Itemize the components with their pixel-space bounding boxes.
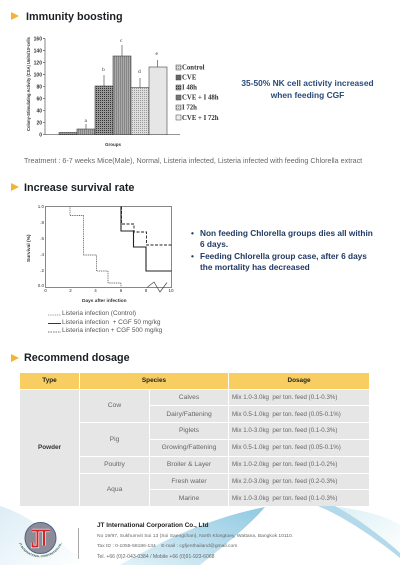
legend: I 48h: [182, 84, 197, 92]
survival legend: [48, 310, 162, 334]
axis labels: .2: [40, 268, 44, 273]
survival line chart: 4: [94, 288, 97, 293]
axis break: [147, 282, 167, 292]
callout: NK cell activity: [241, 78, 374, 100]
bar letters: d: [138, 69, 141, 75]
treatment note: Treatment : 6-7 weeks Mice(Male), Normal, Listeria infected, Listeria infected with feeding Chlorella extract: [24, 156, 362, 164]
y axis labels: 80: [36, 84, 42, 90]
survival line chart: 2: [69, 288, 72, 293]
dosage table: Fresh water: [171, 478, 207, 485]
y axis labels: 160: [34, 36, 42, 42]
dosage table: Powder: [38, 444, 61, 451]
y axis labels: 60: [36, 96, 42, 102]
legend: CVE + I 72h: [182, 115, 219, 122]
survival line chart: 8: [145, 288, 148, 293]
icon: section marker dosage: [11, 354, 19, 362]
dosage table: Species: [142, 377, 166, 384]
company logo: [19, 522, 62, 558]
survival legend: Listeria infection + CGF 500 mg/kg: [62, 327, 162, 334]
axis labels: .8: [40, 220, 44, 225]
dosage table: Pig: [110, 436, 119, 443]
survival line chart: 6: [120, 288, 123, 293]
company info: Tel. +66 (0)2-043-0384 / Mobile +66 (0)91-923-6068: [97, 554, 215, 560]
company info: JT International Corporation Co., Ltd: [97, 522, 208, 529]
y axis labels: 120: [34, 60, 42, 66]
control curve: [70, 206, 121, 287]
y axis labels: 140: [34, 48, 42, 54]
text: Feeding Chlorella group case, after 6 days: [200, 251, 367, 261]
dosage table: [20, 373, 369, 506]
text: •: [191, 251, 194, 261]
legend: [176, 64, 219, 122]
heading: Immunity boosting: Immunity boosting: [26, 11, 123, 23]
legend: Control: [182, 64, 205, 72]
axis labels: .4: [40, 252, 44, 257]
footer divider: [78, 528, 79, 559]
axis labels: 0.0: [38, 283, 44, 288]
dosage table: Broiler & Layer: [167, 461, 211, 468]
heading: Increase survival rate: Increase survival rate: [24, 182, 134, 194]
dosage table: Mix 0.5-1.0kg per ton. feed (0.05-0.1%): [232, 410, 341, 418]
dosage table: Aqua: [107, 486, 122, 493]
y axis labels: 0: [39, 132, 42, 138]
dosage table: Mix 1.0-3.0kg per ton. feed (0.1-0.3%): [232, 394, 337, 401]
dosage table: Mix 0.5-1.0kg per ton. feed (0.05-0.1%): [232, 444, 341, 451]
bullet text: [191, 228, 373, 272]
dosage table: Mix 1.0-3.0kg per ton. feed (0.1-0.3%): [232, 494, 337, 502]
bars: [59, 56, 167, 135]
y axis labels: 40: [36, 108, 42, 114]
y axis labels: [34, 36, 42, 138]
axis labels: 1.0: [38, 204, 44, 209]
dosage table: Cow: [108, 402, 121, 409]
footer wave background: [0, 506, 400, 565]
y axis title: Colony-Stimulating Activity (CSA) Units/10⁵cells: [26, 36, 31, 131]
axis labels: [38, 204, 44, 288]
legend: CVE + I 48h: [182, 94, 219, 102]
dosage table: Growing/Fattening: [162, 444, 216, 451]
axis labels: .6: [40, 236, 44, 241]
survival line chart: [26, 204, 174, 304]
CGF 50 curve: [121, 206, 172, 271]
dosage table: Mix 2.0-3.0kg per ton. feed (0.2-0.3%): [232, 478, 337, 485]
bar letters: c: [120, 38, 123, 44]
y axis labels: 20: [36, 120, 42, 126]
dosage table: Piglets: [179, 427, 199, 434]
bar letters: [84, 38, 158, 124]
company info: Tax ID : 0-1055-58186-134 E-mail : cgfjenthailand@gmail.com: [97, 544, 237, 549]
bar letters: a: [84, 118, 88, 124]
dosage table: Poultry: [104, 461, 125, 468]
company info: [97, 522, 293, 560]
callout: NK cell activity: when feeding CGF: [271, 90, 344, 100]
x title: Days after infection: [82, 298, 127, 304]
bar letters: b: [102, 67, 105, 73]
icon: section marker survival: [11, 183, 19, 191]
y axis labels: 100: [34, 72, 42, 78]
text: 6 days.: [200, 239, 228, 249]
legend: I 72h: [182, 104, 197, 112]
dosage table: Dairy/Fattening: [166, 410, 212, 418]
legend: CVE: [182, 74, 197, 82]
text: Non feeding Chlorella groups dies all within: [200, 228, 373, 238]
dosage table: Dosage: [287, 377, 311, 384]
y title: Survival (%): [26, 234, 32, 262]
icon: section marker immunity: [11, 12, 19, 20]
dosage table: Mix 1.0-3.0kg per ton. feed (0.1-0.3%): [232, 427, 337, 434]
dosage table: Calves: [179, 394, 199, 401]
x axis title: Groups: [105, 142, 121, 147]
company info: No 19/97, Sukhumvit Soi 13 (Soi Saengchan), North Klongtoey, Wattana, Bangkok 10110.: [97, 534, 293, 539]
CGF 500 curve: [122, 206, 172, 245]
dosage table: Marine: [179, 494, 199, 502]
survival line chart: 0: [44, 288, 47, 293]
bar letters: e: [156, 51, 158, 57]
bar chart: colony stimulating activity: [26, 36, 219, 147]
dosage table: Mix 1.0-2.0kg per ton. feed (0.1-0.2%): [232, 461, 337, 468]
callout: NK cell activity: 35-50% NK cell activity increased: [241, 78, 374, 88]
survival legend: Listeria infection + CGF 50 mg/kg: [62, 319, 160, 326]
survival legend: Listeria infection (Control): [62, 310, 136, 317]
dosage table: Type: [42, 377, 57, 384]
survival line chart: 10: [168, 288, 174, 293]
text: the mortality has decreased: [200, 262, 310, 272]
text: •: [191, 228, 194, 238]
heading: Recommend dosage: Recommend dosage: [24, 352, 130, 364]
